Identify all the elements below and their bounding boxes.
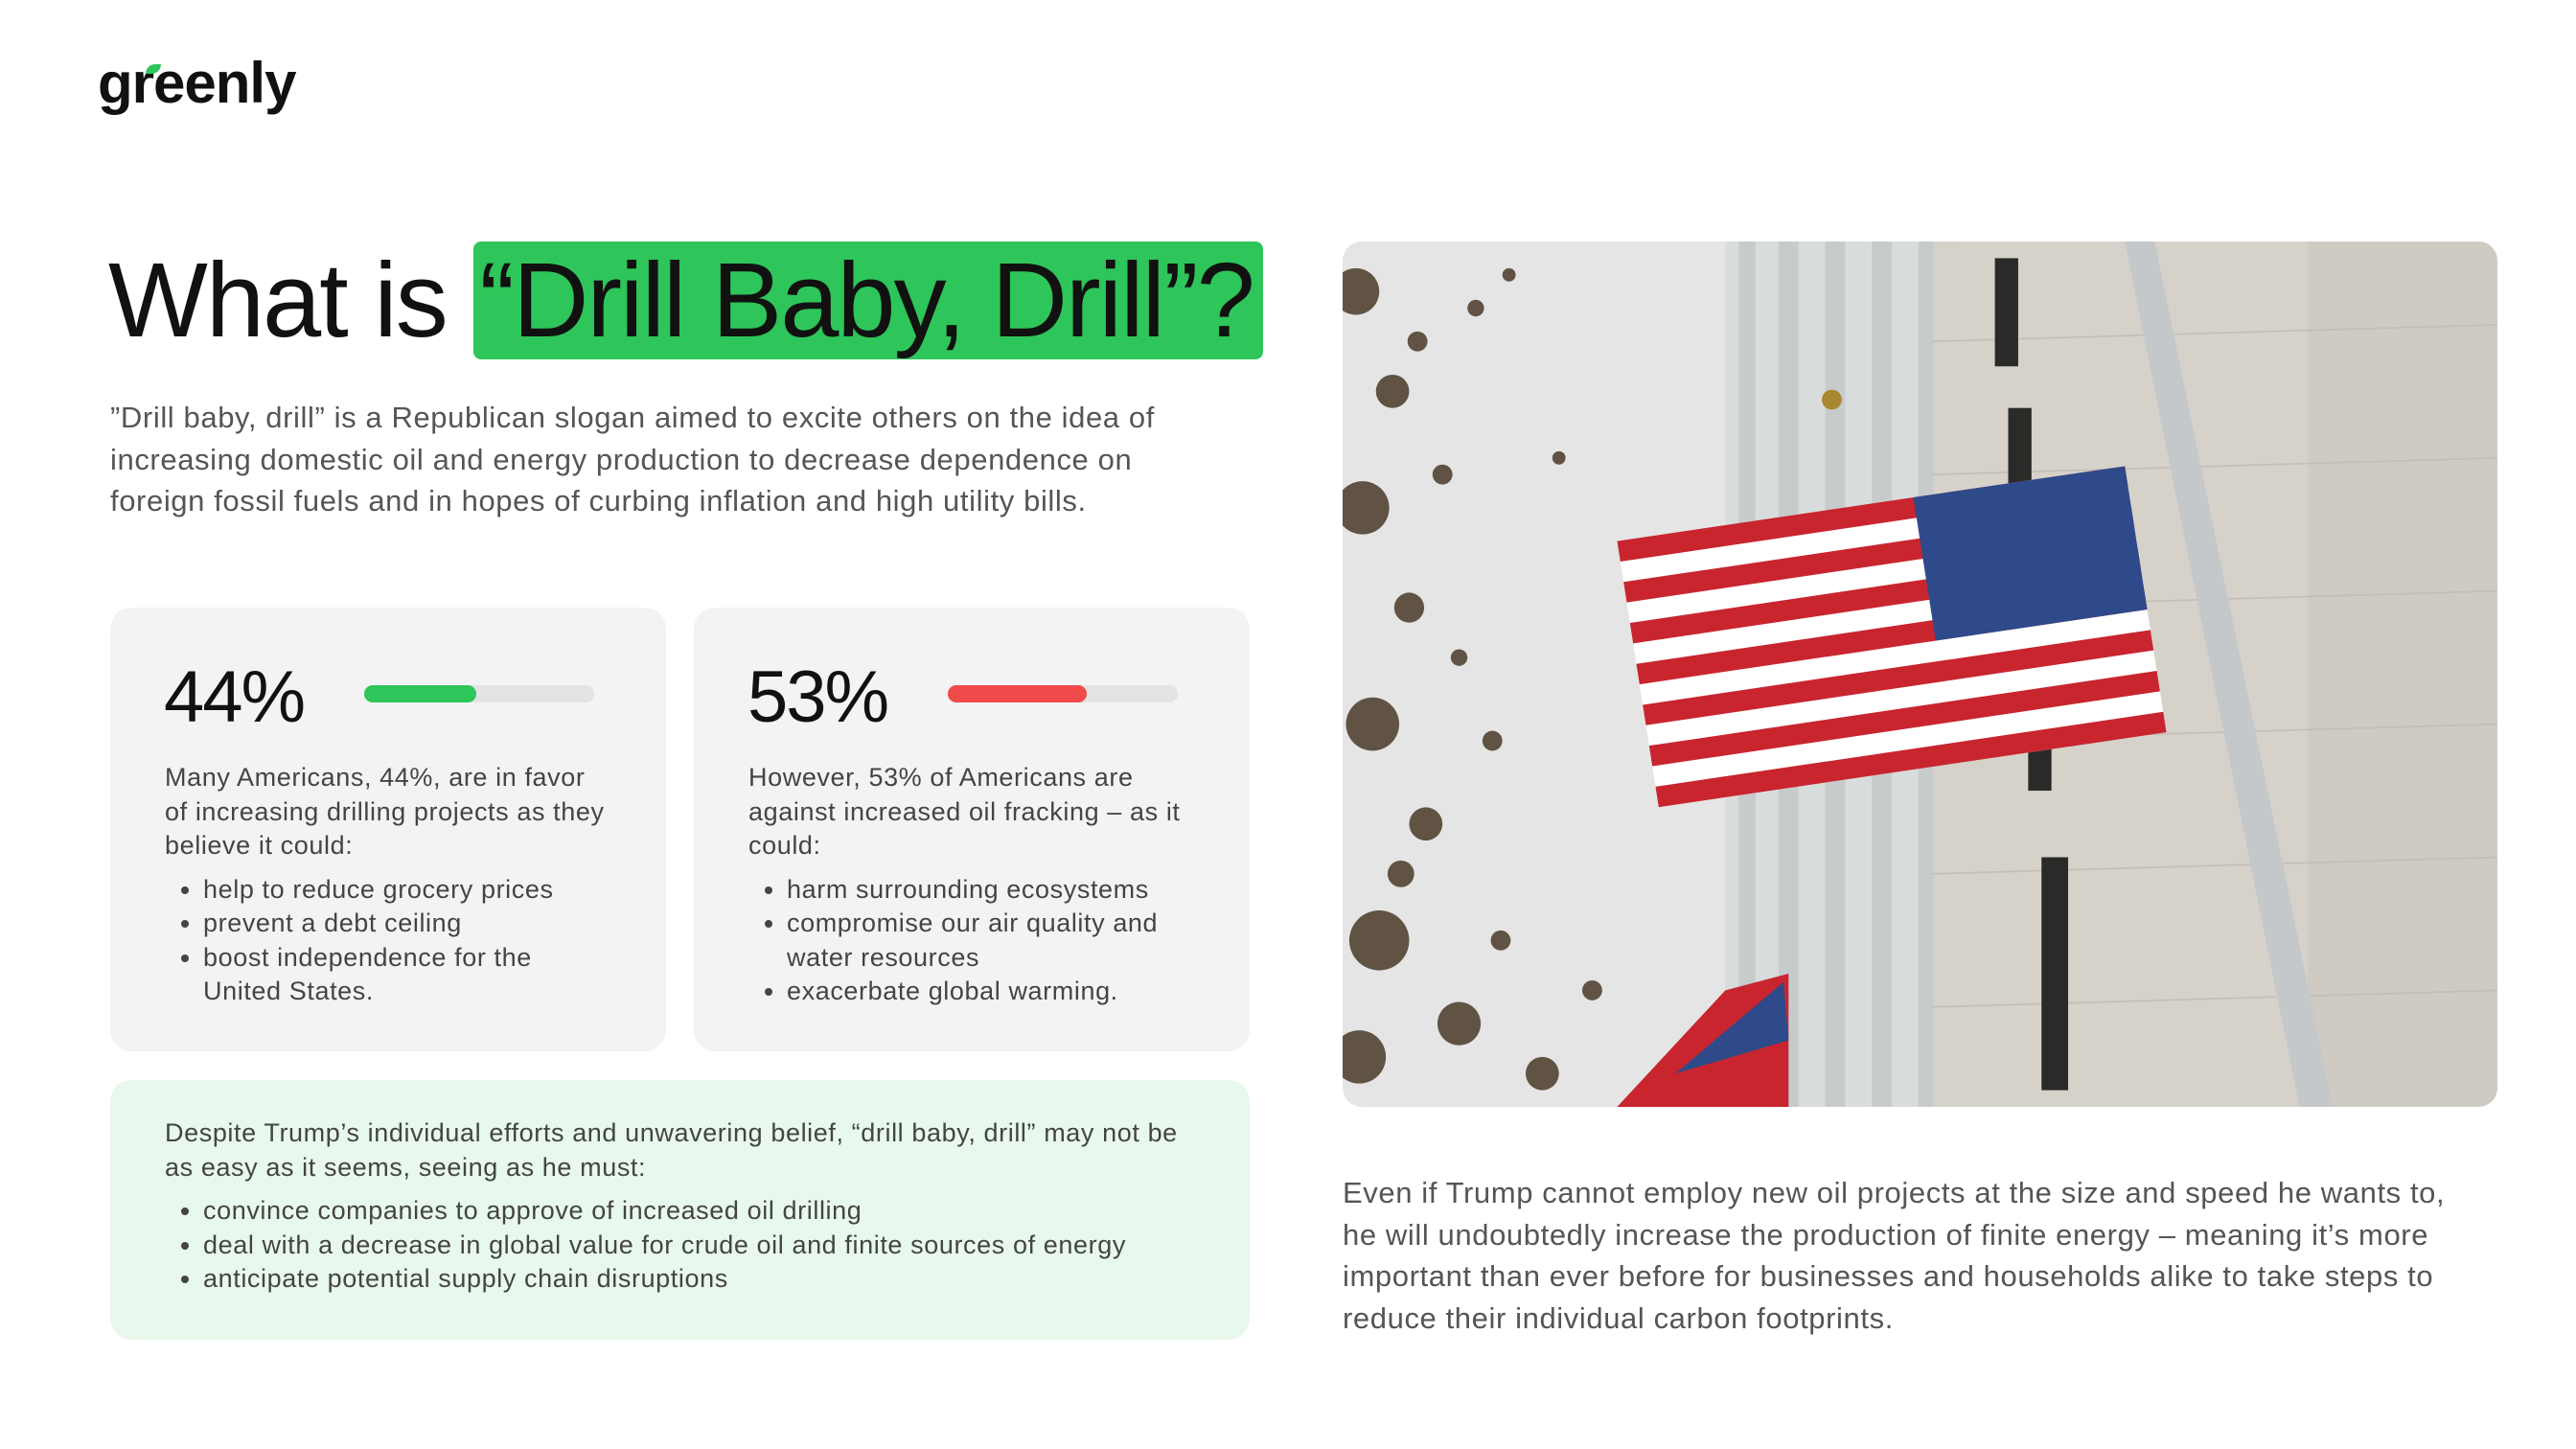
panel: despite: deal with a decrease in global value for crude oil and finite sources of energy bbox=[203, 1230, 1126, 1259]
title: What is “Drill Baby, Drill”? bbox=[108, 242, 1254, 359]
stat 44%: 44% bbox=[164, 656, 304, 738]
text favor: Many Americans, 44%, are in favor of increasing drilling projects as they believe it could: bbox=[165, 763, 605, 860]
panel: despite: anticipate potential supply chain disruptions bbox=[203, 1264, 728, 1293]
text against: exacerbate global warming. bbox=[787, 977, 1118, 1005]
text favor bbox=[165, 763, 605, 1005]
closing paragraph: Even if Trump cannot employ new oil projects at the size and speed he wants to, he will undoubtedly increase the production of finite energy – meaning it’s more important than ever before for businesses and households alike to take steps to reduce their individual carbon footprints. bbox=[1343, 1176, 2445, 1334]
panel: despite: Despite Trump’s individual efforts and unwavering belief, “drill baby, drill” may not be as easy as it seems, seeing as he must: bbox=[165, 1118, 1178, 1181]
panel: despite: convince companies to approve of increased oil drilling bbox=[203, 1196, 862, 1225]
panel: against bbox=[694, 608, 1250, 1051]
bar red bbox=[948, 685, 1178, 702]
photo: flag and building bbox=[1343, 242, 2497, 1107]
text favor: help to reduce grocery prices bbox=[203, 874, 554, 903]
text against bbox=[748, 763, 1181, 1005]
text against: harm surrounding ecosystems bbox=[787, 874, 1149, 903]
panel: despite bbox=[110, 1080, 1250, 1340]
logo: greenly bbox=[98, 51, 295, 115]
panel: in favor bbox=[110, 608, 666, 1051]
text favor: boost independence for the United States. bbox=[203, 943, 532, 1005]
text against: However, 53% of Americans are against increased oil fracking – as it could: bbox=[748, 763, 1181, 860]
stat 53%: 53% bbox=[748, 656, 887, 738]
bar green bbox=[364, 685, 594, 702]
text against: compromise our air quality and water resources bbox=[787, 908, 1158, 972]
intro paragraph: ”Drill baby, drill” is a Republican slogan aimed to excite others on the idea of increasing domestic oil and energy production to decrease dependence on foreign fossil fuels and in hopes of curbing inflation and high utility bills. bbox=[110, 401, 1155, 518]
text favor: prevent a debt ceiling bbox=[203, 908, 462, 937]
